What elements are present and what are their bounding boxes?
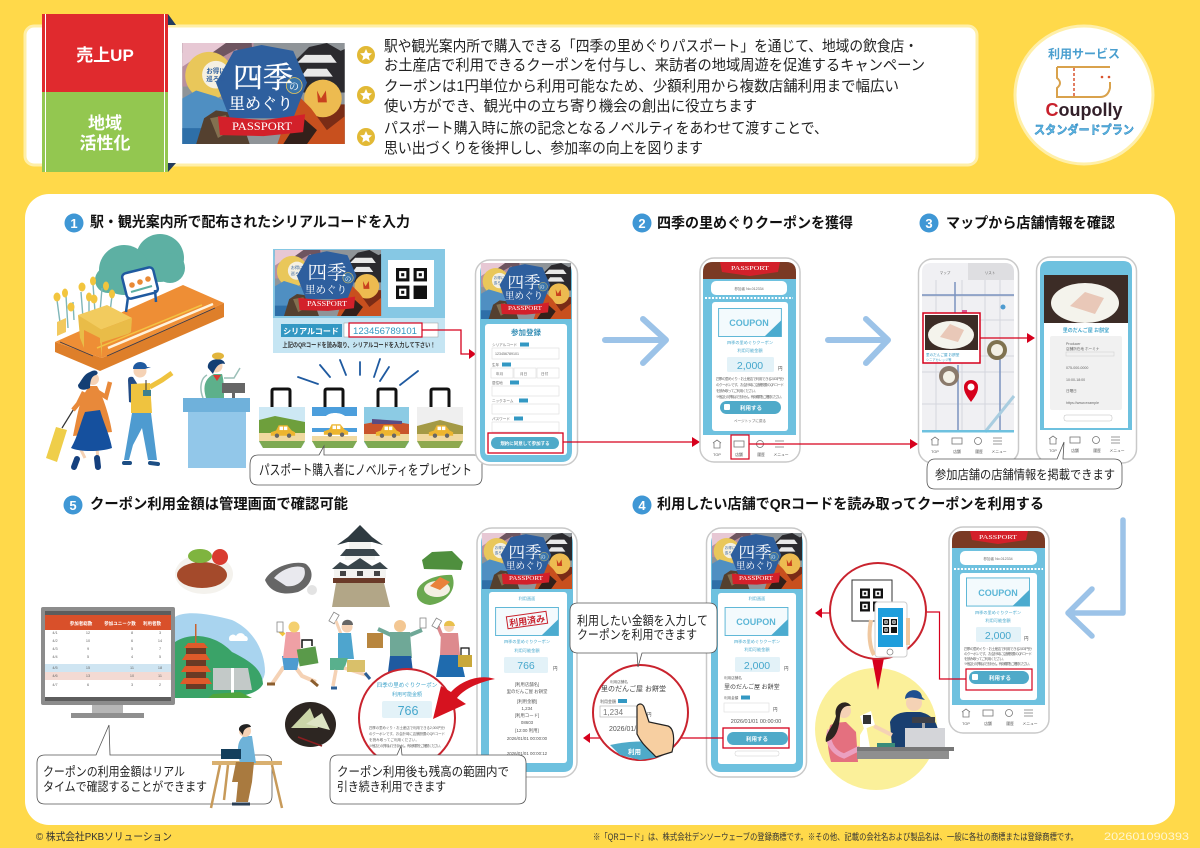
card: serial code flyer: 巡ろう [291, 270, 303, 277]
phone: used coupon: 利用済み [508, 613, 546, 628]
phone: map: シニアカレッジ等 [926, 357, 952, 362]
phone: coupon use button: のクーポンです。お会計時に店舗設置のQRコード [964, 651, 1032, 656]
phone: used coupon: [利用金額] [517, 698, 537, 705]
heading: step 4: 利用したい店舗でQRコードを読み取ってクーポンを利用する [657, 495, 1044, 513]
phone: coupon acquired: メニュー [773, 453, 789, 457]
text: campaign description: 駅や観光案内所で購入できる「四季の里めぐりパスポート」を通じて、地域の飲食店・ [384, 38, 918, 55]
phone: used coupon: 2026/01/01 00:00:00 [507, 736, 548, 741]
card: serial code flyer [273, 249, 445, 353]
passport banner: 巡ろう [206, 74, 226, 83]
phone: coupon acquired: 店舗 [735, 452, 743, 457]
illustration: runner 2 [329, 612, 370, 688]
passport banner: お得に [206, 66, 226, 75]
phone: coupon acquired: COUPON [729, 318, 769, 328]
phone: coupon acquired: TOP [713, 453, 721, 457]
card: serial code flyer: PASSPORT [307, 300, 348, 308]
phone: map: TOP [931, 450, 939, 454]
illustration: castle [332, 525, 390, 607]
illustration: monitor with admin table: 5 [131, 647, 133, 651]
illustration: monitor with admin table: 10 [130, 674, 134, 678]
phone: amount entry: 利用画面 [749, 595, 765, 602]
phone: registration form: 居住地 [492, 380, 503, 385]
phone: map: メニュー [991, 450, 1007, 454]
phone: shop details: 075-000-0000 [1066, 366, 1088, 370]
phone: coupon acquired: 履歴 [757, 452, 765, 457]
badge: Coupolly service plan [1015, 26, 1153, 164]
card: serial code flyer: 上記のQRコードを読み取り、シリアルコードを入力して下さい！ [282, 340, 436, 349]
callout: QR scan circle [830, 563, 926, 690]
phone: coupon acquired: 四季の里めぐり・お土産店で利用できる2,000円分 [716, 376, 784, 381]
illustration: monitor with admin table: 4/5 [52, 666, 58, 670]
icon: star bullets [357, 46, 375, 146]
arrow: button to QR circle [926, 612, 966, 679]
phone: used coupon: [12:00 利用] [515, 727, 539, 734]
phone: shop details: メニュー [1109, 449, 1125, 453]
phone: registration form: 里めぐり [505, 291, 543, 302]
phone: amount entry: 利用金額 [724, 695, 739, 700]
illustration: monitor with admin table: 6 [87, 683, 89, 687]
phone: coupon acquired: 2,000 [737, 360, 763, 372]
phone: used coupon: お得に [495, 545, 506, 550]
callout: magnified balance: 766 [398, 704, 418, 718]
illustration: travelling man [124, 362, 172, 464]
phone: coupon use button: 四季の里めぐりクーポン [975, 609, 1021, 616]
phone: shop details: 店舗所在地 ホーミナ [1066, 346, 1100, 351]
illustration: monitor with admin table: 参加者総数 [70, 620, 93, 627]
illustration: grilled meat plate [175, 549, 233, 594]
heading: step 5: 5 [69, 498, 77, 513]
phone: coupon use button: 2,000 [985, 630, 1011, 642]
passport banner: 四季 [233, 62, 293, 95]
phone: coupon use button: メニュー [1022, 722, 1038, 726]
phone: map [918, 259, 1018, 463]
phone: used coupon: の [540, 554, 546, 561]
phone: map: 履歴 [975, 449, 983, 454]
phone: shop details: https://www.example [1066, 401, 1099, 405]
phone: coupon use button: 履歴 [1006, 721, 1014, 726]
phone: used coupon: 利用可能金額 [514, 647, 540, 654]
phone: coupon use button [949, 527, 1049, 733]
illustration: travelling woman with suitcase [46, 370, 112, 467]
phone: used coupon: 1,234 [522, 706, 533, 711]
callout: remaining balance [330, 746, 526, 804]
callout: novelty: パスポート購入者にノベルティをプレゼント [259, 462, 472, 478]
card: serial code flyer: 123456789101 [353, 326, 417, 337]
phone: registration form: の [539, 284, 545, 291]
arrow: step 3 down to step 4 [1068, 520, 1123, 636]
phone: used coupon: [利用店舗名] [515, 681, 539, 688]
arrow: coupon to map [749, 439, 918, 449]
illustration: monitor with admin table: 4/3 [52, 647, 58, 651]
callout: amount entry circle: 里のだんご屋 お餅堂 [601, 684, 666, 693]
phone: shop details: 日曜日 [1066, 388, 1077, 393]
illustration: monitor with admin table: 9 [87, 647, 89, 651]
phone: map: 里のだんご屋 お餅堂 [926, 352, 960, 357]
phone: coupon acquired: を読み取ってご利用ください。 [716, 388, 758, 393]
callout: amount entry circle: 円 [647, 712, 652, 718]
illustration: monitor with admin table: 4/1 [52, 631, 58, 635]
phone: coupon use button: TOP [962, 722, 970, 726]
heading: step 3: 3 [925, 216, 933, 231]
callout: magnified balance: 四季の里めぐりクーポン [377, 681, 438, 689]
illustration: shop checkout [815, 668, 954, 790]
phone: amount entry: 利用する [746, 735, 768, 743]
arrow: QR circle to phone [815, 608, 830, 618]
illustration: monitor with admin table: 2 [159, 683, 161, 687]
card: serial code flyer: の [345, 276, 351, 283]
phone: map: マップ [940, 270, 951, 275]
phone: coupon use button: ※他店との併用はできません。有効期限をご確認ください。 [964, 661, 1032, 666]
phone: used coupon: 円 [553, 666, 558, 672]
callout: amount entry circle: 2026/01/01 [609, 726, 644, 733]
card: serial code flyer: シリアルコード [283, 327, 339, 336]
phone: coupon acquired: 参加者 No.012334 [734, 286, 764, 291]
phone: registration form: シリアルコード [492, 342, 517, 347]
phone: amount entry: 里めぐり [736, 561, 774, 572]
phone: amount entry: 四季 [738, 543, 772, 562]
callout: enter amount: 利用したい金額を入力して [577, 614, 708, 628]
illustration: station platform [54, 234, 224, 371]
illustration: monitor with admin table: 3 [159, 631, 161, 635]
card: serial code flyer: お得に [291, 264, 303, 271]
illustration: oyster [265, 563, 317, 595]
phone: amount entry: PASSPORT [739, 576, 773, 582]
phone: coupon acquired: PASSPORT [731, 265, 769, 272]
phone: shop details: 店舗 [1071, 448, 1079, 453]
phone: used coupon: 四季の里めぐりクーポン [504, 638, 550, 645]
phone: map: 店舗 [953, 449, 961, 454]
phone: coupon use button: 店舗 [984, 721, 992, 726]
phone: registration form: 巡ろう [494, 280, 504, 285]
phone: used coupon [477, 528, 577, 777]
callout: amount entry circle: 利用金額 [600, 698, 616, 704]
phone: coupon acquired: 利用可能金額 [737, 347, 763, 354]
heading: step 1: 駅・観光案内所で配布されたシリアルコードを入力 [90, 213, 410, 231]
callout: real time confirmation: クーポンの利用金額はリアル [43, 765, 185, 779]
illustration: novelty bags [259, 359, 463, 448]
heading: step 4: 4 [638, 498, 646, 513]
illustration: monitor with admin table: 8 [131, 631, 133, 635]
phone: registration form: 年月 [496, 371, 503, 376]
arrow: map to shop [980, 333, 1035, 343]
badge: Coupolly service plan: スタンダードプラン [1034, 122, 1134, 137]
callout: shop info [927, 442, 1122, 489]
heading: step 3: マップから店舗情報を確認 [946, 214, 1115, 232]
phone: registration form: 四季 [508, 273, 541, 292]
phone: amount entry: 里のだんご屋 お餅堂 [724, 683, 780, 691]
illustration: monitor with admin table: 4/4 [52, 655, 58, 659]
arrow: step 1 to step 2 [605, 319, 666, 363]
callout: enter amount: クーポンを利用できます [577, 628, 697, 642]
callout: magnified balance: 利用可能金額 [392, 691, 422, 698]
phone: coupon use button: 利用する [989, 674, 1011, 682]
phone: coupon acquired: ページトップに戻る [734, 418, 767, 423]
ribbon: benefit tags [42, 14, 176, 172]
illustration: cheering traveler [367, 618, 426, 672]
phone: used coupon: 766 [517, 660, 535, 672]
phone: amount entry: 2,000 [744, 660, 770, 672]
phone: amount entry: の [770, 554, 776, 561]
illustration: monitor with admin table: 4/7 [52, 683, 58, 687]
text: campaign description: お土産店で利用できるクーポンを付与し、来訪者の地域周遊を促進するキャンペーン [384, 57, 925, 74]
illustration: runner 1 [267, 622, 318, 686]
phone: registration form: PASSPORT [508, 306, 542, 312]
phone: shop details: 里のだんご屋 お餅堂 [1063, 327, 1109, 334]
phone: amount entry: お得に [725, 545, 736, 550]
callout: magnified balance: 四季の里めぐり・お土産店で利用できる2,000円分 [369, 725, 446, 730]
phone: coupon use button: COUPON [978, 588, 1018, 598]
callout: amount entry circle: 1,234 [603, 708, 624, 717]
passport banner: の [289, 82, 299, 93]
phone: used coupon: 2026/01/01 00:00:12 [507, 751, 548, 756]
heading: step 2: 四季の里めぐりクーポンを獲得 [657, 214, 853, 232]
illustration: monitor with admin table: 4/6 [52, 674, 58, 678]
phone: registration form: 日付 [541, 371, 549, 376]
text: campaign description: 思い出づくりを後押しし、参加率の向上を図ります [384, 140, 703, 157]
text: campaign description: クーポンは1円単位から利用可能なため、少額利用から複数店舗利用まで幅広い [384, 78, 899, 95]
ribbon: benefit tags: 活性化 [80, 134, 130, 153]
text: campaign description: パスポート購入時に旅の記念となるノベルティをあわせて渡すことで、 [384, 120, 828, 137]
card: serial code flyer: 四季 [307, 262, 347, 284]
heading: step 1: 1 [70, 216, 78, 231]
illustration: man at desk [211, 724, 282, 808]
phone: amount entry: 2026/01/01 00:00:00 [731, 719, 781, 725]
phone: registration form: パスワード [492, 416, 510, 421]
illustration: monitor with admin table [41, 607, 175, 718]
illustration: monitor with admin table: 参加ユニーク数 [104, 620, 136, 627]
phone: coupon use button: 利用可能金額 [985, 617, 1011, 624]
heading: step 5: クーポン利用金額は管理画面で確認可能 [90, 495, 348, 513]
phone: coupon use button: 四季の里めぐり・お土産店で利用できる2,000円分 [964, 646, 1032, 651]
illustration: monitor with admin table: 4/2 [52, 639, 58, 643]
phone: coupon acquired: のクーポンです。お会計時に店舗設置のQRコード [716, 382, 784, 387]
callout: amount entry circle: 利用店舗名 [610, 679, 628, 684]
phone: shop details [1036, 257, 1136, 463]
phone: used coupon: PASSPORT [509, 576, 543, 582]
text: campaign description [384, 38, 925, 157]
illustration: monitor with admin table: 13 [86, 674, 90, 678]
illustration: monitor with admin table: 12 [86, 631, 90, 635]
illustration: monitor with admin table: 5 [87, 655, 89, 659]
callout: magnified balance [359, 669, 455, 767]
illustration: monitor with admin table: 4 [131, 655, 133, 659]
phone: amount entry [706, 528, 806, 777]
panel: main flow [25, 194, 1175, 825]
phone: used coupon: 08603 [521, 720, 534, 725]
phone: coupon acquired: 円 [778, 366, 783, 372]
arrow: curved to magnified balance [433, 677, 495, 719]
phone: coupon acquired: 四季の里めぐりクーポン [727, 339, 773, 346]
phone: registration form: 規約に同意して参加する [500, 440, 550, 447]
callout: remaining balance: クーポン利用後も残高の範囲内で [337, 764, 509, 779]
phone: used coupon: [利用コード] [515, 712, 539, 719]
footer: document number: 202601090393 [1104, 831, 1189, 843]
phone: registration form: お得に [494, 275, 505, 280]
callout: magnified balance: を読み取ってご利用ください。 [369, 737, 419, 742]
callout: real time confirmation: タイムで確認することができます [43, 779, 207, 794]
phone: amount entry: COUPON [736, 617, 776, 627]
card: serial code flyer: 里めぐり [305, 284, 347, 296]
phone: coupon acquired: ※他店との併用はできません。有効期限をご確認ください。 [716, 394, 784, 399]
illustration: monitor with admin table: 11 [158, 674, 162, 678]
phone: coupon use button: 円 [1024, 636, 1029, 642]
phone: registration form: 123456789101 [495, 352, 519, 356]
phone: amount entry: 四季の里めぐりクーポン [734, 638, 780, 645]
passport banner: PASSPORT [232, 121, 292, 133]
phone: used coupon: 巡ろう [495, 550, 505, 555]
phone: coupon use button: を読み取ってご利用ください。 [964, 656, 1006, 661]
callout: amount entry circle: 利用 [628, 747, 641, 756]
heading: step 2: 2 [638, 216, 646, 231]
phone: coupon use button: 参加者 No.012334 [983, 556, 1013, 561]
phone: amount entry: 利用可能金額 [744, 646, 770, 653]
phone: coupon acquired [700, 258, 800, 462]
illustration: pagoda and waterfall landscape [175, 613, 265, 698]
illustration: woman with bag [432, 618, 472, 677]
phone: used coupon: 利用画面 [519, 595, 535, 602]
phone: coupon acquired: 利用する [740, 404, 762, 412]
callout: magnified balance: のクーポンです。お会計時に店舗設置のQRコード [369, 731, 446, 736]
illustration: monitor with admin table: 3 [131, 683, 133, 687]
panel: summary card [25, 14, 977, 172]
phone: shop details: 履歴 [1093, 448, 1101, 453]
phone: amount entry: 円 [773, 707, 778, 713]
illustration: monitor with admin table: 15 [86, 666, 90, 670]
footer: trademark note: ※「QRコード」は、株式会社デンソーウェーブの登録商標です。※その他、記載の会社名および製品名は、一般に各社の商標または登録商標です。 [593, 831, 1078, 842]
phone: used coupon: 里めぐり [506, 561, 544, 572]
illustration: monitor with admin table: 利用者数 [143, 620, 161, 627]
callout: remaining balance: 引き続き利用できます [337, 780, 446, 794]
footer: copyright: © 株式会社PKBソリューション [36, 830, 172, 843]
illustration: monitor with admin table: 5 [159, 655, 161, 659]
phone: registration form: 参加登録 [511, 327, 541, 337]
callout: magnified balance: ※他店との併用はできません。有効期限をご確認ください。 [369, 743, 443, 748]
illustration: monitor with admin table: 10 [86, 639, 90, 643]
passport banner: 里めぐり [229, 95, 293, 113]
phone: used coupon: 里のだんご屋 お餅堂 [507, 688, 548, 695]
phone: coupon use button: PASSPORT [979, 534, 1017, 541]
phone: amount entry: 円 [784, 666, 789, 672]
illustration: monitor with admin table: 18 [158, 666, 162, 670]
phone: used coupon: 四季 [508, 543, 542, 562]
text: campaign description: 使い方ができ、観光中の立ち寄り機会の創出に役立ちます [384, 98, 757, 115]
illustration: monitor with admin table: 7 [159, 647, 161, 651]
illustration: monitor with admin table: 14 [158, 639, 162, 643]
phone: shop details: TOP [1049, 449, 1057, 453]
phone: shop details: 10:00-18:00 [1066, 378, 1085, 382]
phone: shop details: Producer [1066, 342, 1081, 346]
phone: map: リスト [985, 270, 996, 275]
illustration: wrapped sweets [417, 551, 463, 605]
arrow: button to amount circle [583, 733, 723, 743]
illustration: monitor with admin table: 11 [130, 666, 134, 670]
ribbon: benefit tags: 地域 [88, 114, 122, 133]
phone: amount entry: 利用店舗名 [724, 675, 742, 680]
phone: registration form: 生年 [492, 362, 500, 367]
callout: amount entry circle [593, 665, 688, 760]
arrow: form to coupon [563, 437, 700, 447]
illustration: information counter [183, 352, 250, 468]
passport banner [182, 43, 345, 144]
arrow: serial to form [422, 330, 476, 359]
badge: Coupolly service plan: 利用サービス [1048, 46, 1120, 61]
badge: Coupolly service plan: Coupolly [1046, 100, 1122, 120]
phone: registration form: ニックネーム [492, 398, 514, 403]
callout: novelty [250, 446, 482, 485]
phone: registration form [476, 260, 578, 465]
callout: real time confirmation [37, 725, 272, 804]
phone: registration form: 月日 [520, 371, 527, 376]
callout: shop info: 参加店舗の店舗情報を掲載できます [935, 467, 1115, 482]
illustration: sweets on dark plate [285, 702, 336, 747]
ribbon: benefit tags: 売上UP [76, 45, 134, 65]
callout: enter amount [570, 603, 717, 667]
arrow: step 2 to step 3 [828, 319, 888, 363]
phone: amount entry: 巡ろう [725, 550, 735, 555]
illustration: monitor with admin table: 6 [131, 639, 133, 643]
